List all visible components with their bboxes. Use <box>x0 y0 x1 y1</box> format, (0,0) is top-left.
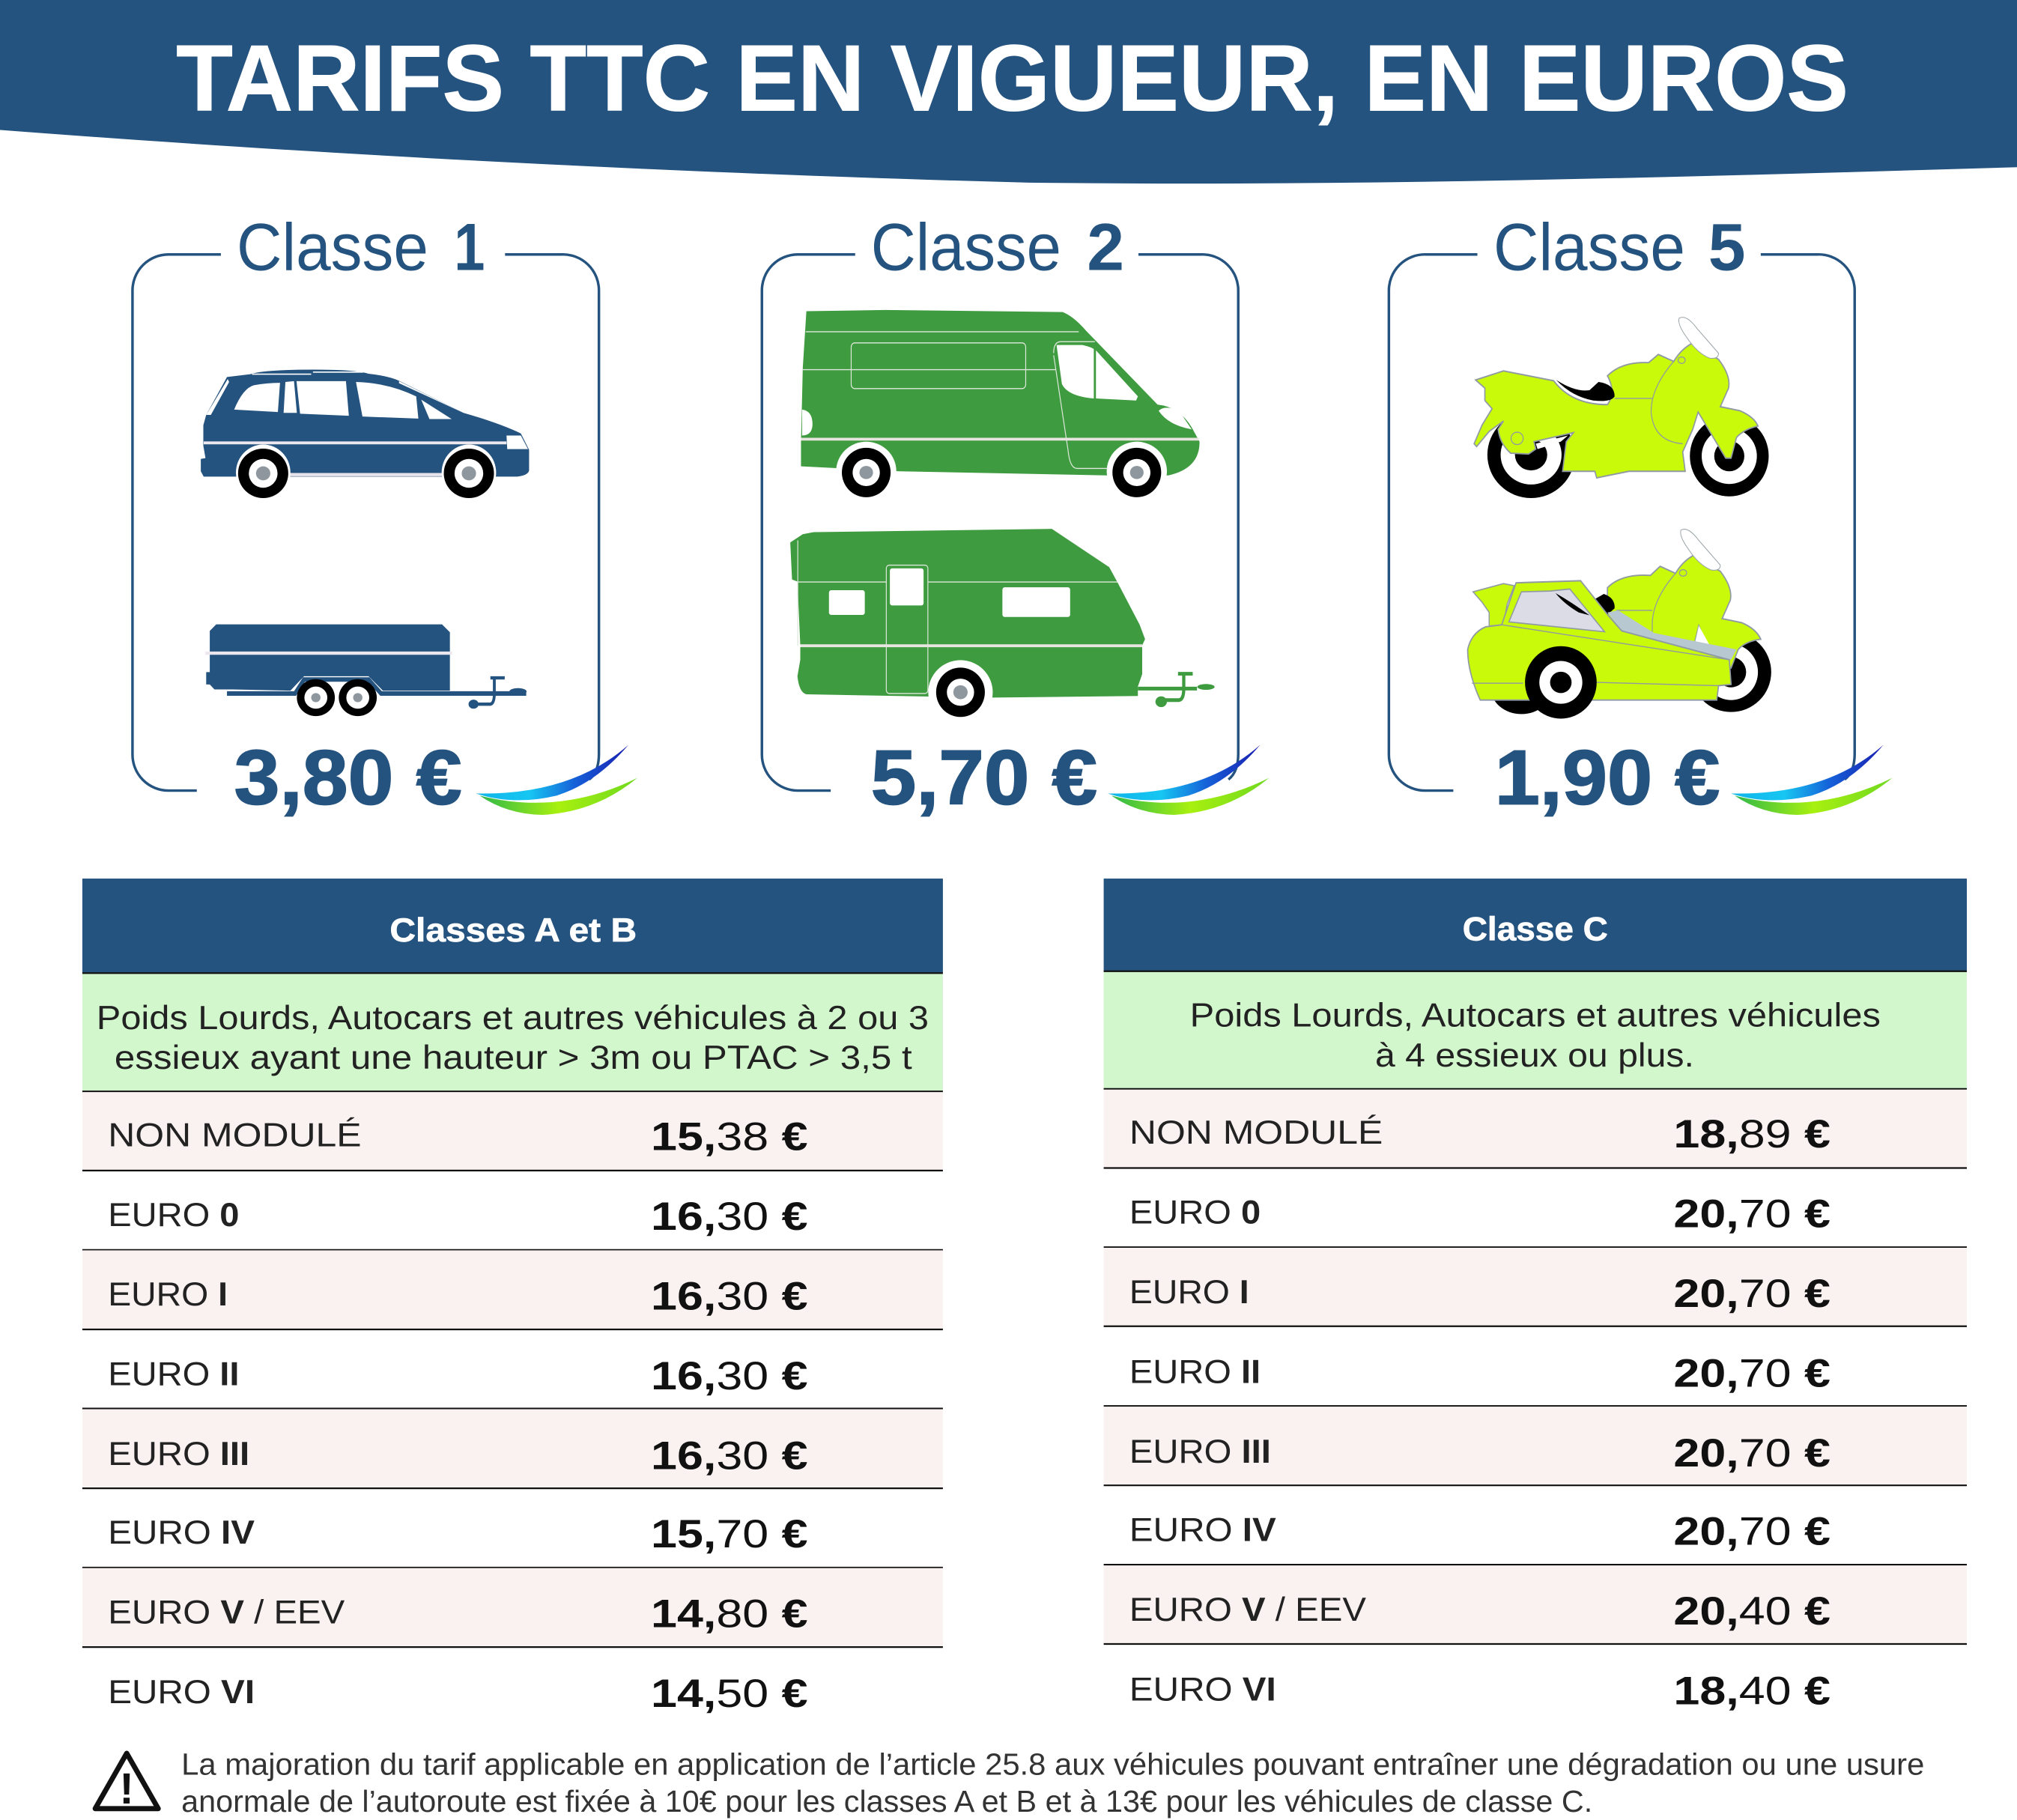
vehicle description: à 4 essieux ou plus. <box>1375 1037 1694 1074</box>
row: euro VI: EURO VI <box>1129 1672 1276 1708</box>
row: euro 0: EURO 0 <box>108 1197 239 1234</box>
table: classe C <box>1104 879 1967 1725</box>
header banner <box>0 0 2017 183</box>
row: euro IV <box>1104 1510 1967 1565</box>
row: euro IV: 20, 70 € <box>1673 1510 1831 1554</box>
icon: van <box>801 310 1200 501</box>
row: euro III: 16, 30 € <box>651 1434 808 1478</box>
row: euro III: EURO III <box>108 1436 249 1472</box>
logo swoosh <box>476 745 637 815</box>
row: euro V / EEV: EURO V / EEV <box>108 1594 345 1631</box>
icon: caravan <box>790 529 1215 724</box>
row: euro I <box>1104 1248 1967 1326</box>
row: euro VI: EURO VI <box>108 1674 255 1711</box>
row: euro II: 16, 30 € <box>651 1354 808 1398</box>
row: euro V / EEV: 20, 40 € <box>1673 1589 1831 1634</box>
row: euro VI: 18, 40 € <box>1673 1669 1831 1714</box>
row: euro V / EEV <box>1104 1565 1967 1644</box>
row: non module <box>1104 1090 1967 1168</box>
table header: Classe C <box>1463 911 1608 947</box>
icon: car <box>201 370 529 500</box>
row: non module <box>82 1092 943 1171</box>
icon: motorcycle with sidecar <box>1468 530 1771 718</box>
price: classe 1: 3,80 € <box>234 734 462 820</box>
footnote: anormale de l’autoroute est fixée à 10€ pour les classes A et B et à 13€ pour les véhicules de classe C. <box>181 1784 1592 1819</box>
row: euro IV: EURO IV <box>108 1514 255 1551</box>
row: euro 0: 20, 70 € <box>1673 1192 1831 1236</box>
heading: classe 5: Classe <box>1493 210 1685 285</box>
title: TARIFS TTC EN VIGUEUR, EN EUROS <box>176 26 1848 131</box>
table header <box>82 879 943 972</box>
row: euro II: EURO II <box>1129 1353 1261 1390</box>
icon: motorcycle <box>1474 318 1768 498</box>
row: euro III <box>1104 1407 1967 1485</box>
heading: classe 5: 5 <box>1708 210 1746 285</box>
footnote: La majoration du tarif applicable en application de l’article 25.8 aux véhicules pouvant entraîner une dégradation ou une usure <box>181 1747 1924 1781</box>
row: euro II: 20, 70 € <box>1673 1351 1831 1395</box>
panel: classe 5 <box>1389 210 1892 820</box>
row: euro VI: 14, 50 € <box>651 1672 808 1716</box>
panel: classe 2 <box>762 210 1269 820</box>
vehicle description: Poids Lourds, Autocars et autres véhicules <box>1190 998 1881 1034</box>
row: non module: 15, 38 € <box>651 1114 808 1159</box>
icon: trailer <box>205 625 527 716</box>
row: euro V / EEV: 14, 80 € <box>651 1592 808 1637</box>
table header <box>1104 879 1967 971</box>
row: euro IV: 15, 70 € <box>651 1512 808 1556</box>
row: euro VI <box>1129 1669 1831 1714</box>
row: euro 0: 16, 30 € <box>651 1195 808 1239</box>
vehicle description: Poids Lourds, Autocars et autres véhicules à 2 ou 3 <box>97 1000 929 1037</box>
row: euro V / EEV <box>82 1568 943 1647</box>
vehicle description <box>82 972 943 1091</box>
price: classe 5: 1,90 € <box>1495 734 1720 820</box>
logo swoosh <box>1108 745 1269 815</box>
row: euro II <box>1104 1351 1967 1406</box>
vehicle description <box>1104 971 1967 1089</box>
heading: classe 2: Classe <box>871 210 1061 285</box>
footnote <box>181 1747 1924 1819</box>
logo swoosh <box>1731 745 1892 815</box>
row: euro 0 <box>82 1195 943 1250</box>
heading: classe 2: 2 <box>1087 210 1124 285</box>
row: euro I: EURO I <box>1129 1274 1249 1311</box>
row: euro IV: EURO IV <box>1129 1512 1276 1549</box>
row: euro II: EURO II <box>108 1356 239 1393</box>
row: euro I: 16, 30 € <box>651 1274 808 1318</box>
row: euro 0 <box>1104 1192 1967 1247</box>
table: classes A et B <box>82 879 943 1728</box>
row: euro II <box>82 1354 943 1409</box>
row: euro I: 20, 70 € <box>1673 1272 1831 1316</box>
row: euro III <box>82 1410 943 1488</box>
table header: Classes A et B <box>389 912 637 949</box>
panel: classe 1 <box>133 210 637 820</box>
row: non module: NON MODULÉ <box>108 1117 362 1153</box>
heading: classe 1: 1 <box>454 210 485 285</box>
vehicle description: essieux ayant une hauteur > 3m ou PTAC > 3,5 t <box>115 1040 912 1076</box>
icon: warning triangle: ! <box>119 1765 134 1813</box>
row: non module: NON MODULÉ <box>1129 1114 1383 1151</box>
row: euro I: EURO I <box>108 1276 228 1313</box>
row: euro III: EURO III <box>1129 1434 1271 1470</box>
heading: classe 1: Classe <box>237 210 428 285</box>
price: classe 2: 5,70 € <box>871 734 1097 820</box>
row: euro III: 20, 70 € <box>1673 1431 1831 1475</box>
row: euro 0: EURO 0 <box>1129 1194 1261 1231</box>
row: euro IV <box>82 1512 943 1568</box>
icon: warning triangle <box>95 1753 158 1813</box>
row: euro VI <box>108 1672 808 1716</box>
row: euro V / EEV: EURO V / EEV <box>1129 1592 1366 1628</box>
row: non module: 18, 89 € <box>1673 1112 1831 1156</box>
row: euro I <box>82 1250 943 1329</box>
